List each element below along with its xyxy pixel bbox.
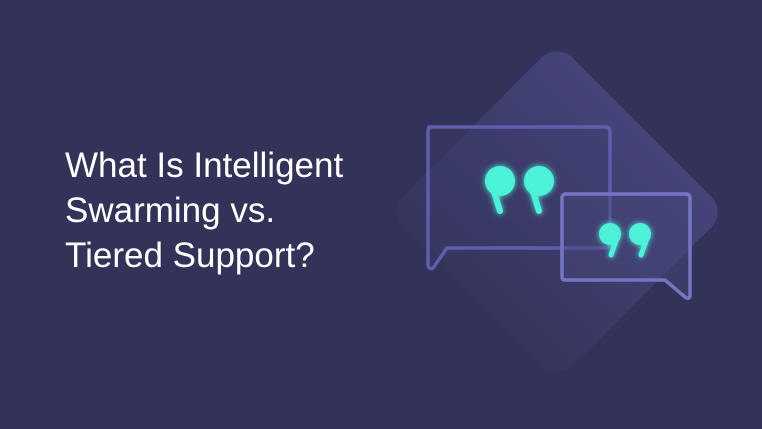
large speech bubble [428, 127, 610, 269]
title: Swarming vs. [65, 191, 275, 230]
small speech bubble [562, 194, 690, 298]
title: Tiered Support? [65, 236, 315, 275]
title [65, 146, 343, 275]
diamond background [387, 42, 727, 382]
title: What Is Intelligent [65, 146, 343, 185]
icon: small quotes [599, 223, 651, 255]
icon: large quotes [485, 166, 554, 211]
